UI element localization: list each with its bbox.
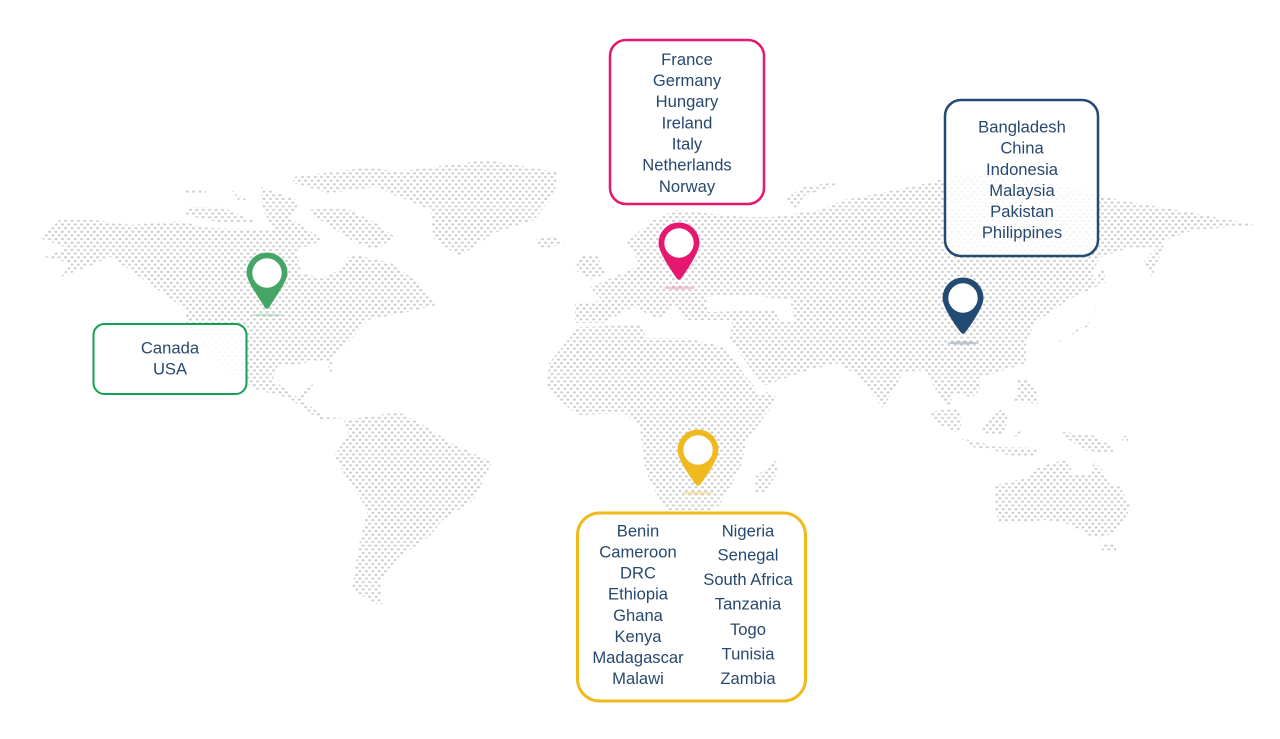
callout: Europe countries	[610, 40, 764, 204]
callout: Europe countries: Italy	[672, 134, 703, 154]
callout: Africa countries: Tanzania	[715, 594, 782, 614]
map: Tasmania	[1099, 543, 1116, 552]
callout: North America countries: Canada	[141, 338, 200, 358]
callout: Europe countries: Hungary	[656, 92, 719, 111]
map: Eurasia	[575, 173, 1255, 408]
map: Africa	[547, 325, 778, 522]
callout: Asia countries	[945, 100, 1098, 256]
map: Arctic islands	[186, 187, 395, 250]
map: Britain and Ireland	[575, 255, 605, 280]
callout: Asia countries: Bangladesh	[978, 118, 1066, 136]
callout: Europe countries: Germany	[653, 71, 722, 90]
dotted world map	[40, 160, 1255, 607]
icon: green location pin	[246, 252, 288, 316]
map: Iceland	[535, 236, 565, 248]
callout: Africa countries: Zambia	[720, 669, 776, 688]
callout: Europe countries: Netherlands	[642, 156, 732, 174]
map: Greenland	[293, 160, 557, 257]
callout: Africa countries: Cameroon	[599, 542, 677, 562]
callout: Asia countries: China	[1000, 138, 1044, 158]
callout: Africa countries: South Africa	[703, 570, 794, 589]
callout: Africa countries: Malawi	[612, 669, 664, 688]
map: Madagascar	[755, 460, 778, 493]
icon: pink location pin	[658, 222, 700, 290]
callout: Europe countries: Norway	[659, 177, 716, 196]
callout: Asia countries: Philippines	[982, 223, 1062, 242]
callout: Africa countries: Kenya	[614, 627, 662, 646]
callout: North America countries: USA	[153, 360, 188, 378]
callout: Africa countries: Ghana	[613, 606, 664, 625]
callout: Europe countries: Ireland	[662, 114, 712, 132]
map: Japan and Sakhalin	[1054, 270, 1105, 343]
callout: Africa countries: DRC	[620, 564, 656, 582]
map: North America	[40, 217, 437, 420]
callout: Africa countries: Madagascar	[592, 648, 684, 667]
callout: Africa countries: Togo	[730, 620, 766, 639]
map: Southeast Asia islands	[928, 379, 1128, 457]
callout: Africa countries: Benin	[617, 522, 659, 540]
map: South America	[334, 412, 492, 607]
callout: Africa countries: Senegal	[718, 546, 778, 564]
map: Indochina and Malay peninsula	[930, 377, 980, 405]
icon: yellow location pin	[678, 429, 718, 494]
callout: Asia countries: Malaysia	[989, 181, 1056, 200]
callout: Africa countries	[578, 513, 806, 701]
callout: Asia countries: Pakistan	[990, 202, 1054, 221]
callout: Europe countries: France	[661, 50, 713, 69]
callout: Africa countries: Ethiopia	[608, 584, 669, 604]
callout: North America countries	[94, 324, 246, 394]
map: Novaya Zemlya	[785, 182, 835, 210]
callout: Africa countries: Nigeria	[722, 522, 775, 540]
icon: navy location pin	[942, 277, 984, 344]
map: inland seas cut-outs	[706, 295, 795, 395]
callout: Asia countries: Indonesia	[986, 160, 1059, 179]
callout: Africa countries: Tunisia	[722, 644, 775, 664]
map: Australia	[995, 459, 1130, 538]
